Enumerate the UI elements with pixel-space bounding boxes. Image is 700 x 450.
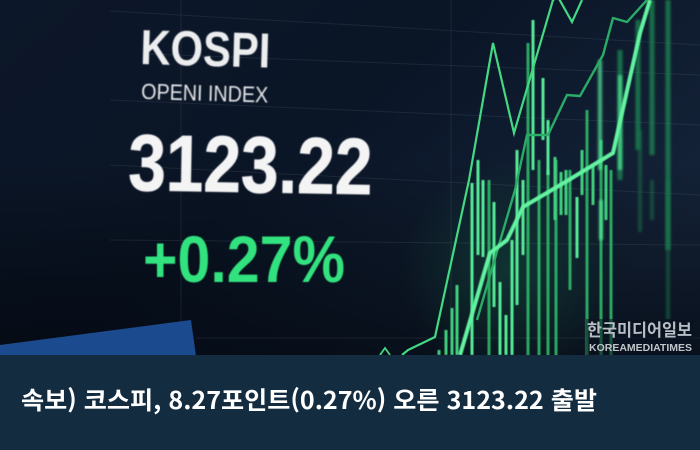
index value: 3123.22 xyxy=(128,118,373,211)
subtitle: OPENI INDEX: OPENI INDEX xyxy=(141,79,269,108)
watermark xyxy=(586,319,694,355)
percent change: +0.27% xyxy=(143,222,345,296)
thin rising line xyxy=(402,0,582,355)
main thick line xyxy=(460,0,650,355)
watermark: KOREAMEDIATIMES xyxy=(589,342,692,354)
headline banner: 속보) 코스피, 8.27포인트(0.27%) 오른 3123.22 출발 xyxy=(21,382,597,417)
title: KOSPI: KOSPI xyxy=(140,21,271,79)
blue wedge xyxy=(0,320,196,356)
small peak xyxy=(380,348,390,355)
headline banner xyxy=(0,355,700,450)
dim mid line xyxy=(477,0,647,320)
watermark: 한국미디어일보 xyxy=(587,321,692,340)
candlestick bars xyxy=(439,0,668,356)
